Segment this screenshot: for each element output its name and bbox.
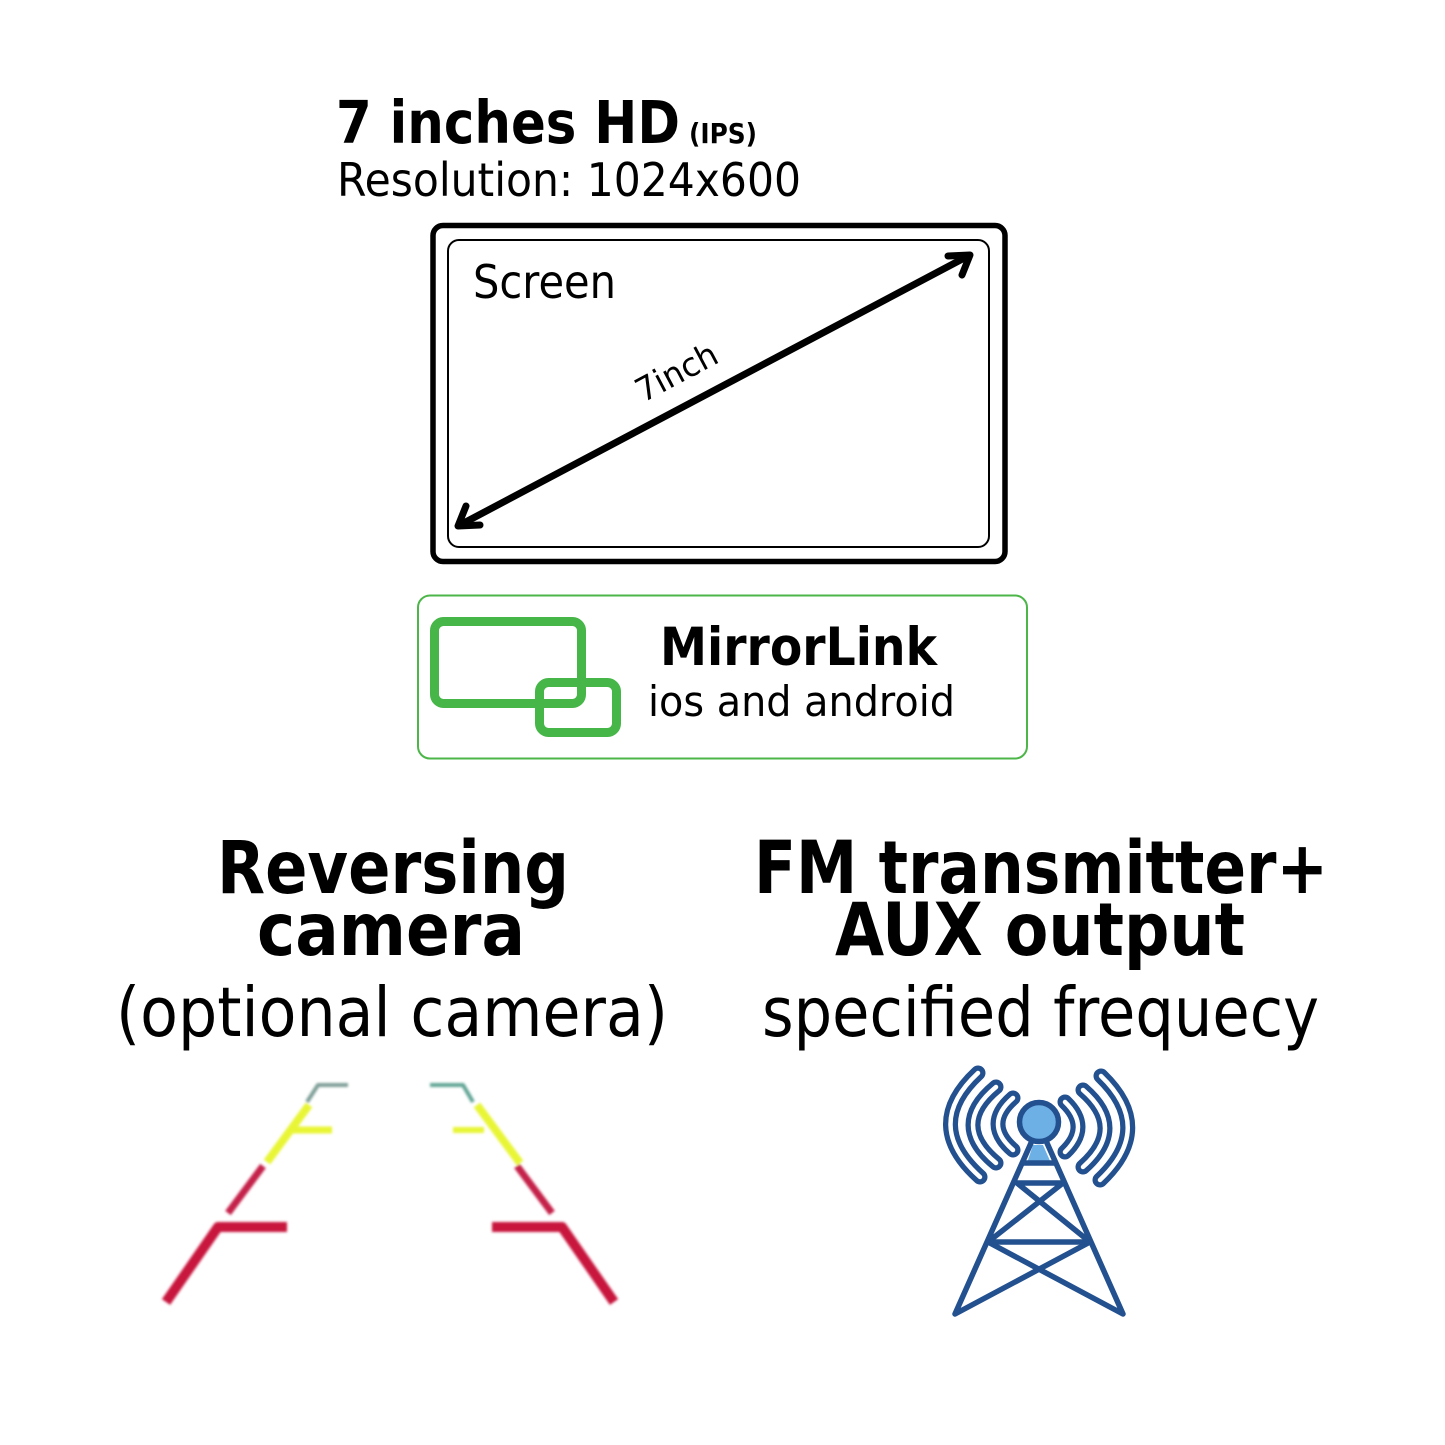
heading: reversing camera: [217, 826, 569, 973]
heading: reversing camera: camera: [257, 888, 525, 973]
heading: FM transmitter and AUX output: AUX output: [835, 888, 1245, 973]
panel: screen diagram: [433, 226, 1005, 562]
label: screen: Screen: [473, 255, 616, 309]
text: resolution: Resolution: 1024x600: [337, 153, 801, 207]
icon: radio tower: [950, 1073, 1128, 1314]
heading: 7 inches HD: (IPS): [689, 117, 757, 150]
icon: right radio waves: [1065, 1076, 1128, 1180]
icon: left radio waves: [950, 1073, 1013, 1177]
icon: tower lattice: [955, 1143, 1123, 1314]
heading: FM transmitter and AUX output: FM transmitter+: [754, 826, 1328, 911]
icon: mirrored screens: [434, 622, 616, 732]
label: 7inch: 7inch: [628, 334, 724, 410]
arrow: screen diagonal: [458, 255, 970, 526]
heading: reversing camera: Reversing: [217, 826, 569, 911]
heading: FM transmitter and AUX output: [754, 826, 1328, 973]
heading: 7 inches HD: 7 inches HD: [336, 88, 680, 157]
chart: reversing guide lines: [166, 1085, 614, 1302]
heading: MirrorLink: MirrorLink: [660, 617, 939, 678]
text: optional camera: (optional camera): [116, 973, 668, 1053]
text: ios and android: ios and android: [648, 677, 955, 726]
text: specified frequecy: specified frequecy: [762, 973, 1319, 1053]
icon: antenna ball: [1020, 1102, 1058, 1142]
panel: MirrorLink: [418, 596, 1027, 758]
